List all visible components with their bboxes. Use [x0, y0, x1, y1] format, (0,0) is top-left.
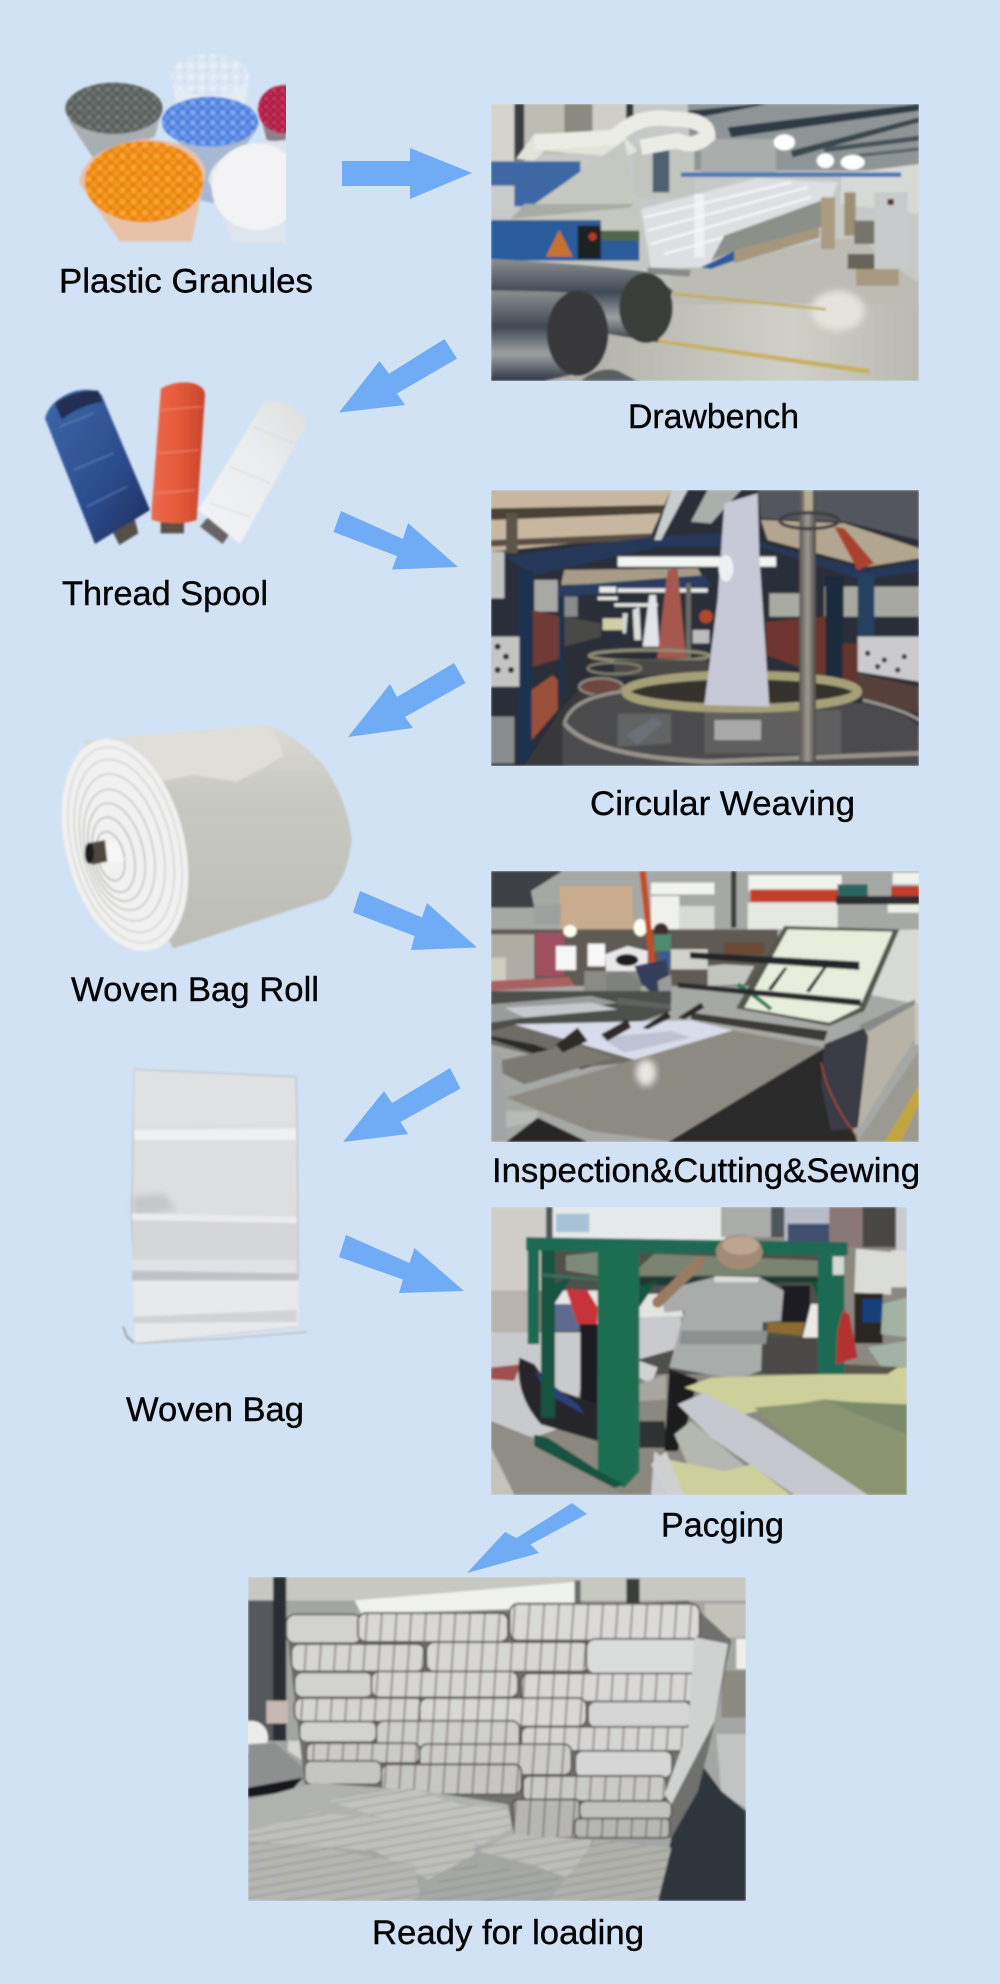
label: Woven Bag: Woven Bag: [126, 1391, 304, 1429]
photo: circular weaving: [491, 490, 919, 766]
arrow: drawbench to thread spool: [339, 339, 457, 412]
arrow: cutting to woven bag: [343, 1068, 460, 1142]
label: Ready for loading: Ready for loading: [372, 1914, 644, 1952]
icon: plastic granules photo: [64, 54, 286, 243]
label: Pacging: Pacging: [661, 1506, 784, 1544]
icon: thread spools: [44, 380, 306, 546]
arrow: thread spool to circular weaving: [334, 511, 458, 570]
arrow: granules to drawbench: [342, 148, 472, 199]
label: Thread Spool: Thread Spool: [62, 575, 268, 613]
label: Plastic Granules: Plastic Granules: [59, 262, 313, 300]
label: Drawbench: Drawbench: [628, 398, 799, 436]
icon: woven bag roll: [61, 724, 352, 952]
label: Woven Bag Roll: Woven Bag Roll: [71, 971, 319, 1009]
label: Circular Weaving: Circular Weaving: [590, 785, 855, 823]
arrow: packaging to ready for loading: [467, 1503, 587, 1573]
label: Inspection & Cutting & Sewing: Inspection&Cutting&Sewing: [492, 1152, 920, 1190]
arrow: woven bag to packaging: [339, 1235, 464, 1293]
arrow: woven bag roll to cutting: [353, 891, 477, 950]
icon: woven bag: [122, 1068, 308, 1345]
photo: ready for loading: [248, 1577, 746, 1901]
photo: inspection, cutting and sewing: [491, 871, 919, 1142]
photo: packaging: [491, 1207, 907, 1495]
arrow: circular weaving to woven bag roll: [348, 663, 466, 737]
photo: drawbench: [491, 104, 919, 381]
